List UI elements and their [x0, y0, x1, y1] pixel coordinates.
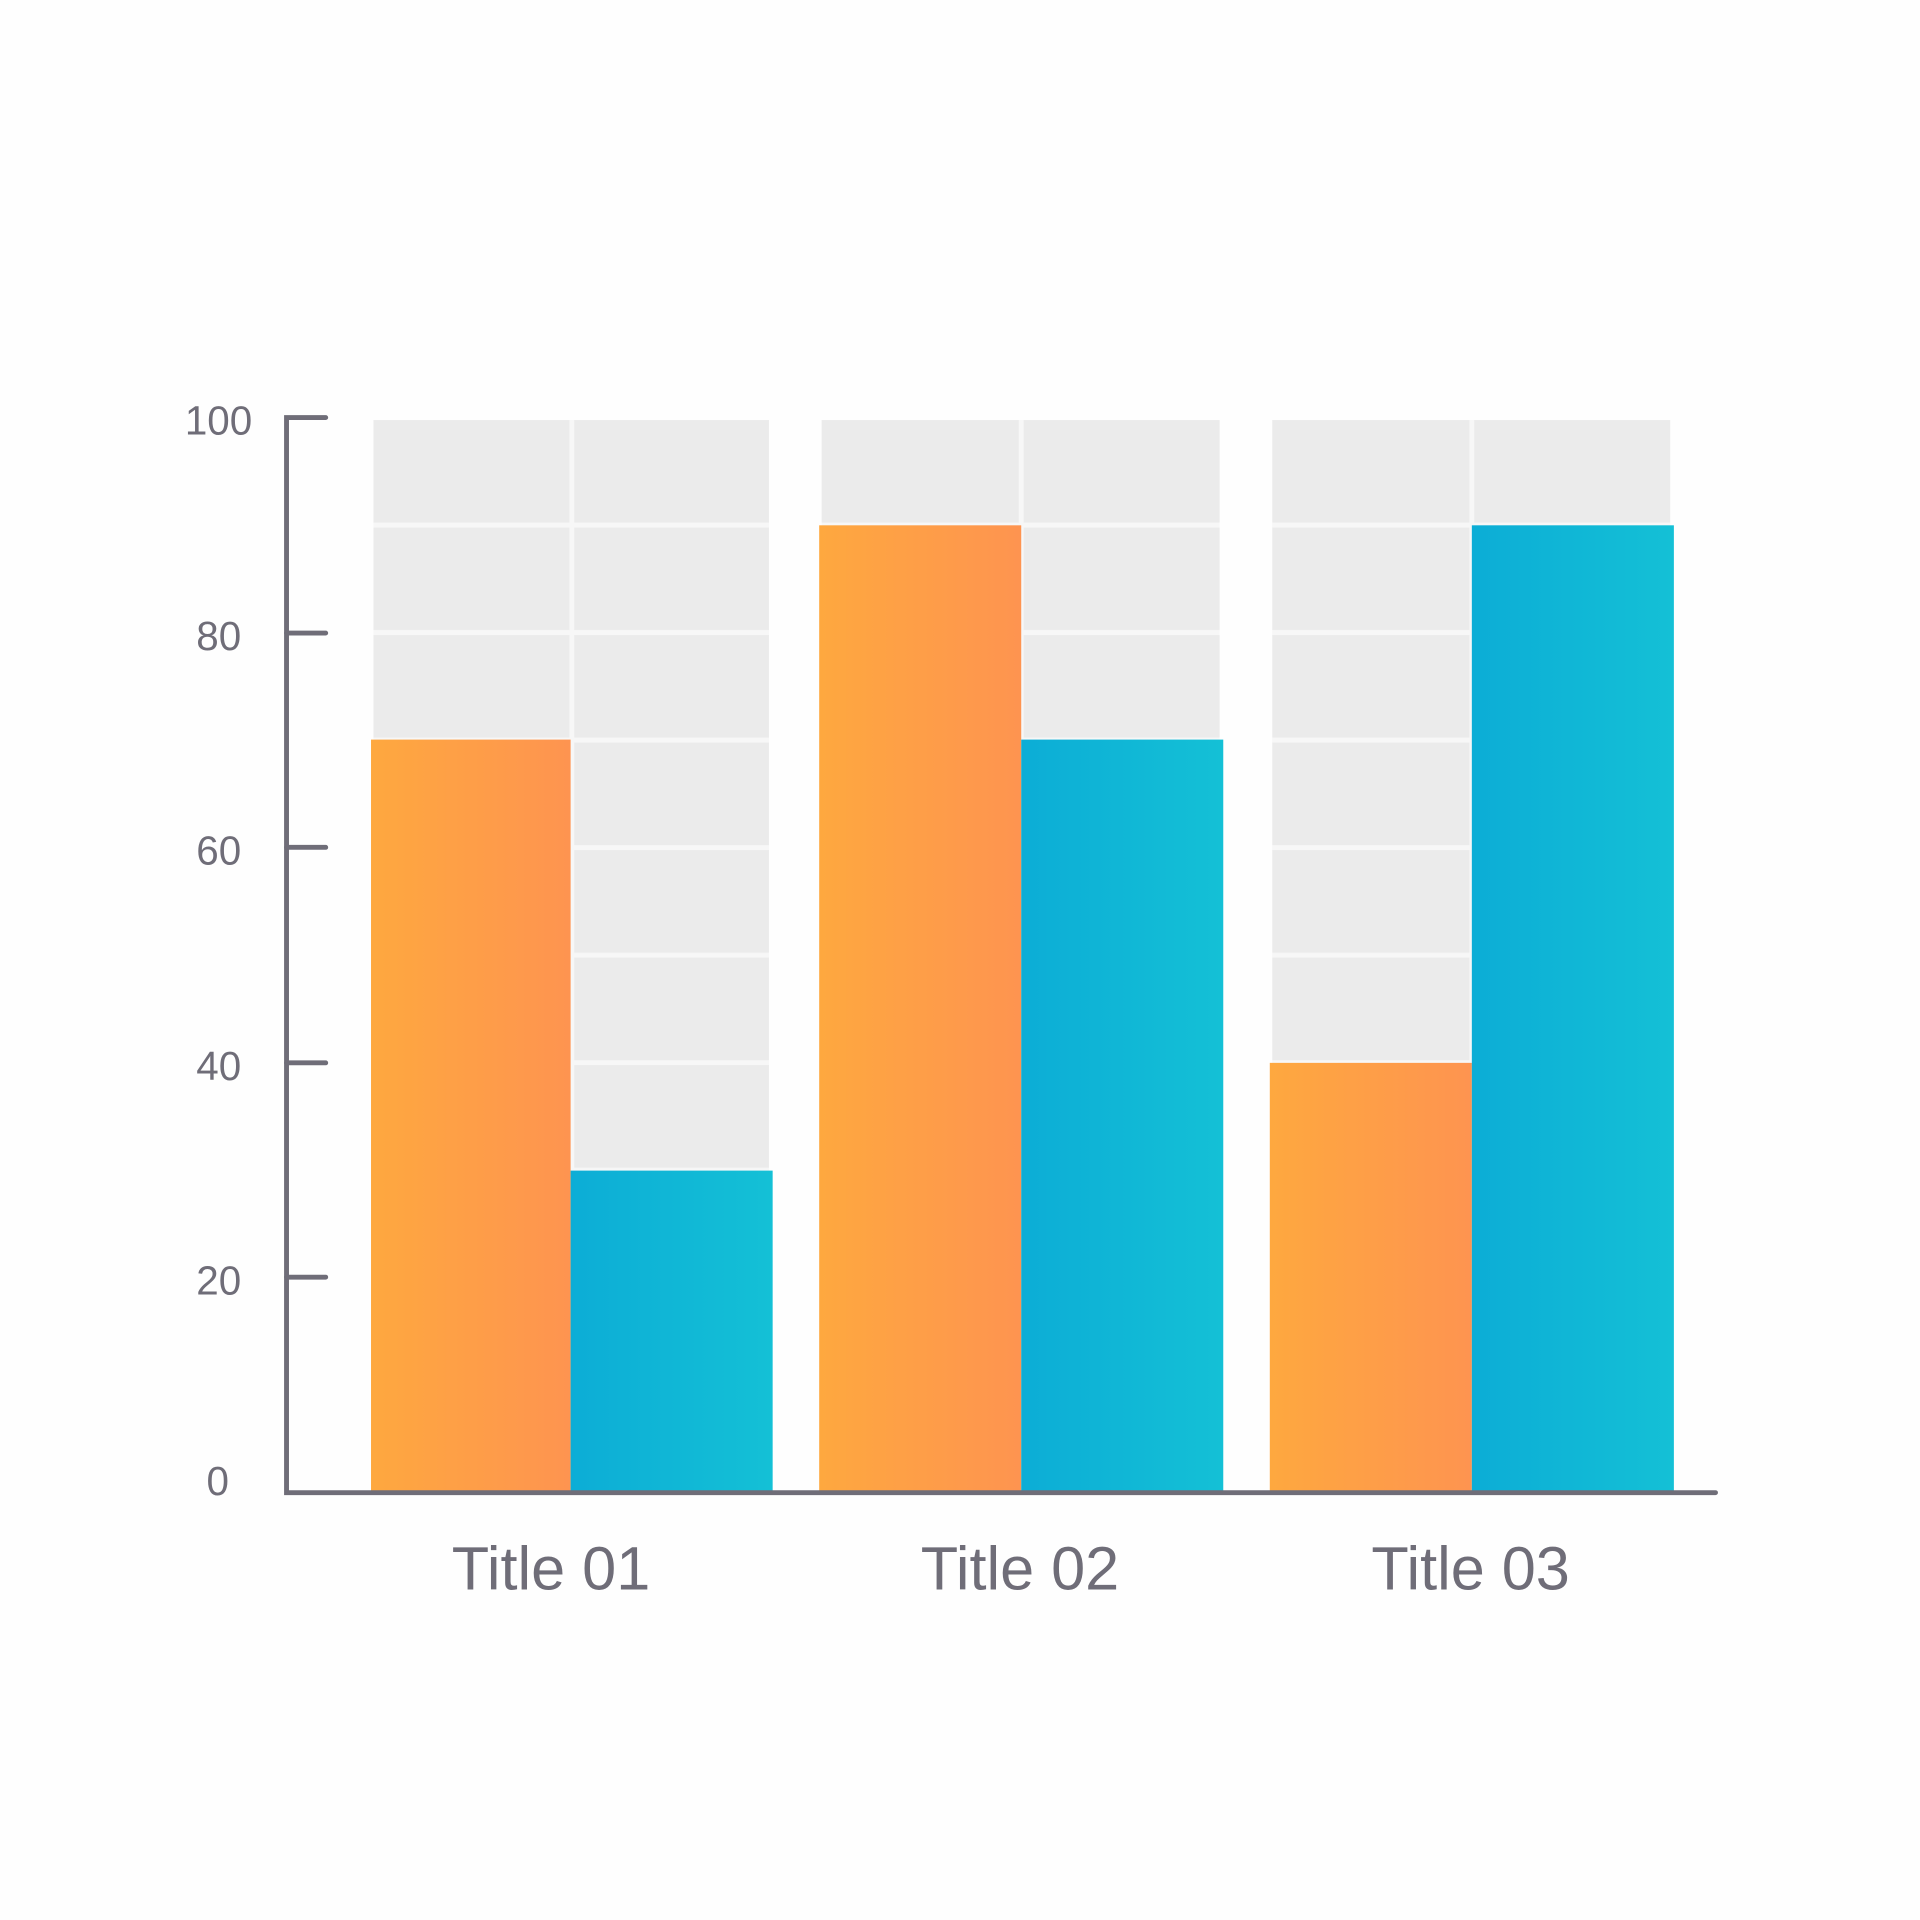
chart background grids [373, 420, 1670, 1493]
x-axis labels [452, 1534, 1570, 1602]
y-axis labels: 80 [196, 613, 241, 659]
y-axis labels: 40 [196, 1043, 241, 1089]
y-axis labels: 20 [196, 1257, 241, 1303]
x-axis labels: Title 03 [1371, 1534, 1570, 1602]
axes [287, 418, 1716, 1493]
bars: Title 03 [1270, 525, 1674, 1493]
x-axis labels: Title 01 [452, 1534, 650, 1602]
x-axis labels: Title 02 [921, 1534, 1119, 1602]
y-axis labels: 60 [196, 827, 241, 873]
bars: Title 01 [371, 740, 773, 1493]
y-axis labels: 0 [207, 1458, 229, 1504]
bars: Title 02 [819, 525, 1223, 1493]
y-axis labels: 100 [185, 398, 252, 444]
y-axis labels [185, 398, 252, 1504]
